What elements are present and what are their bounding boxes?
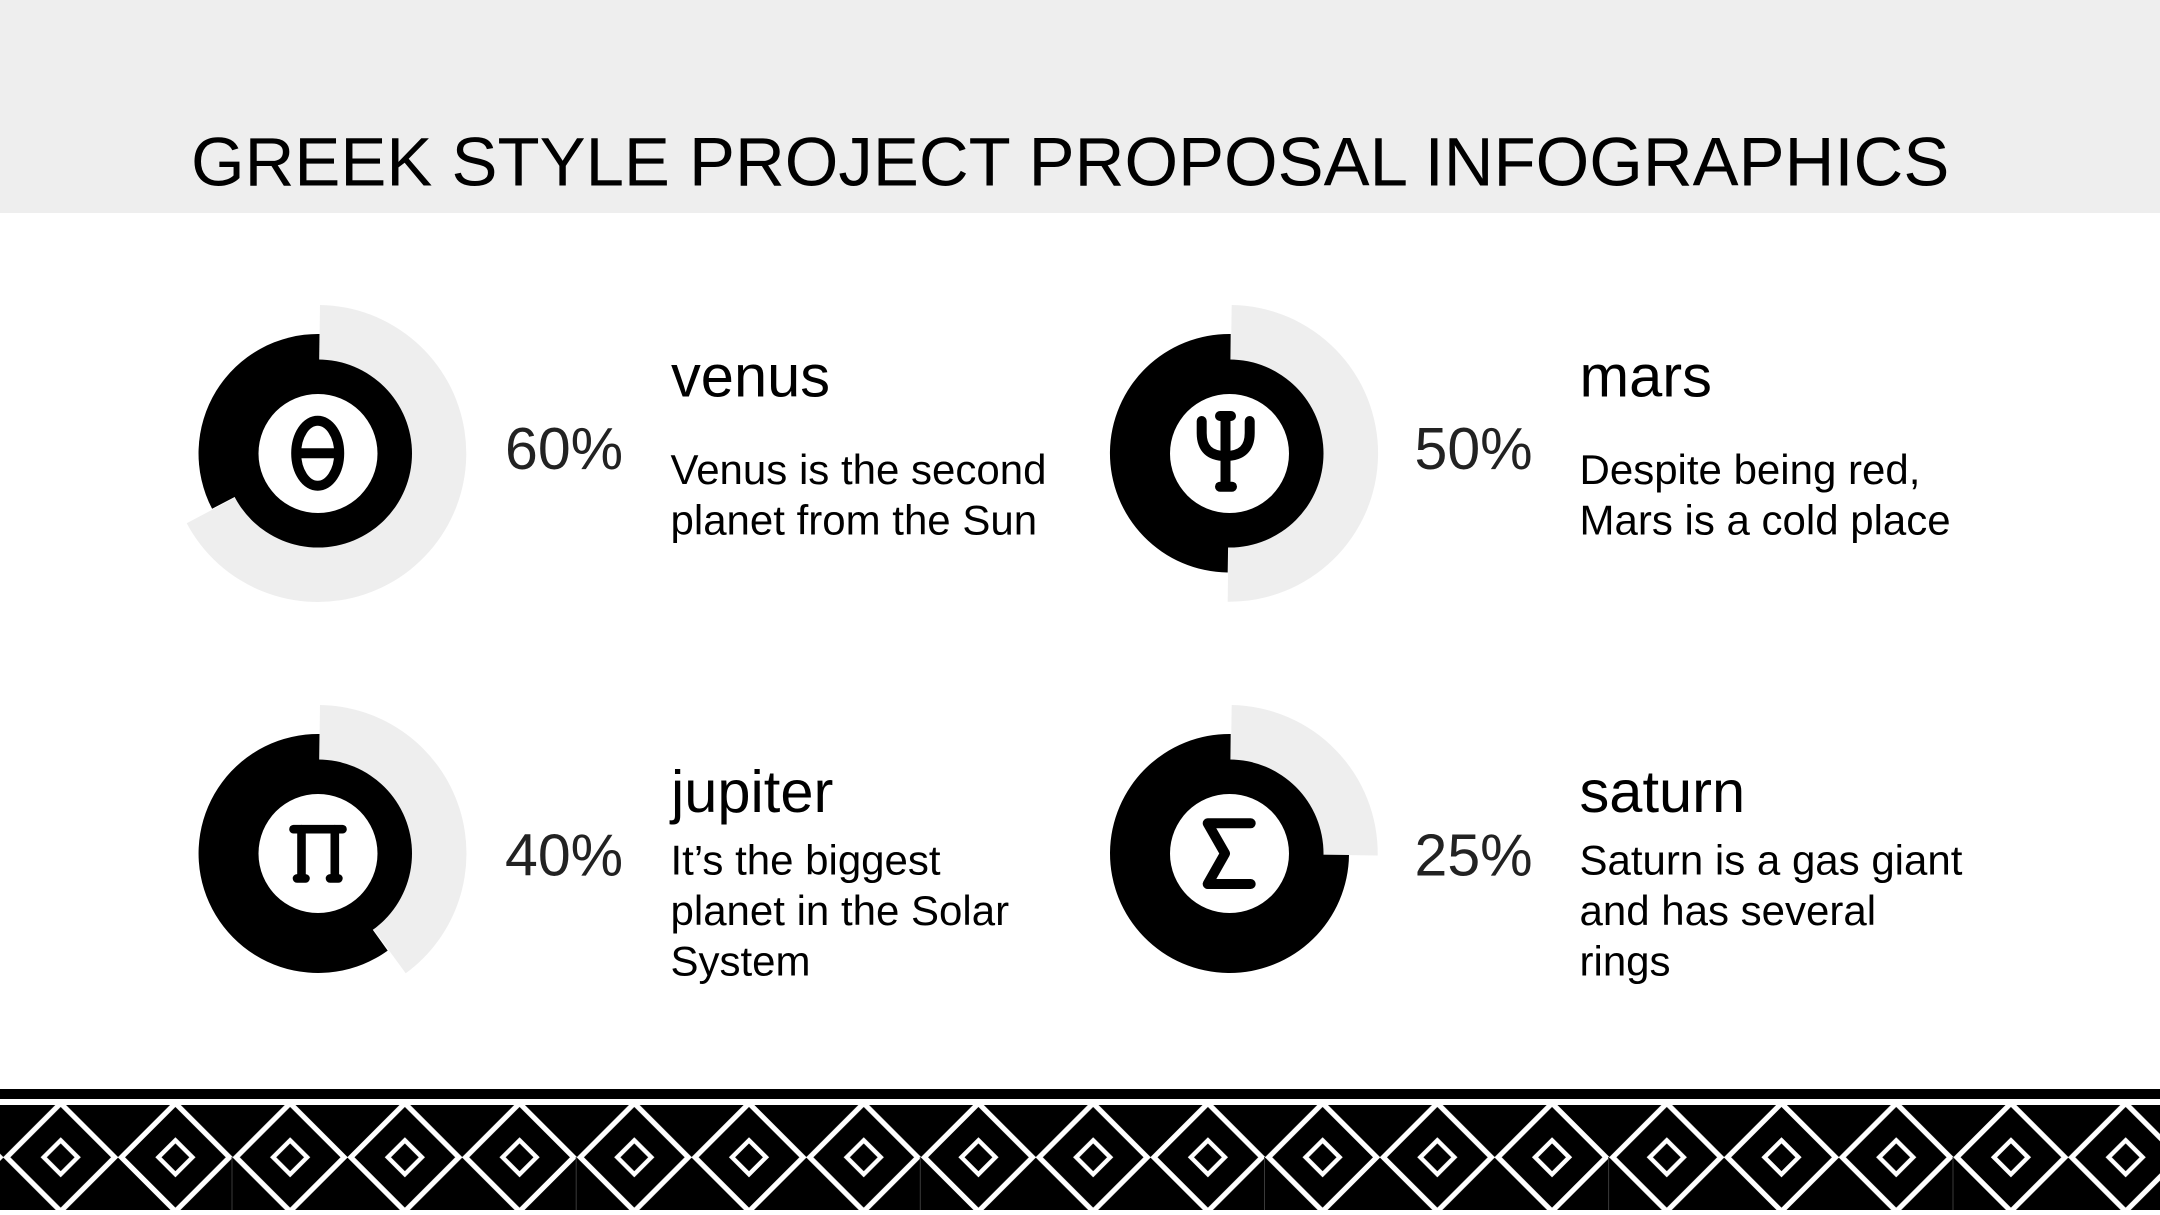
heading: saturn: saturn [1580, 758, 1745, 825]
header band [0, 0, 2160, 213]
heading: mars: mars [1580, 343, 1712, 410]
description: mars: Despite being red, [1580, 446, 1920, 493]
panel: venus [187, 305, 1046, 602]
donut chart: mars 50% [1110, 305, 1378, 602]
icon: sigma [1208, 823, 1251, 884]
donut chart: jupiter 40% [199, 705, 466, 973]
icon: psi [1202, 416, 1250, 487]
panel: mars [1110, 305, 1951, 602]
description: mars: Mars is a cold place [1580, 496, 1951, 544]
panel: saturn [1110, 705, 1963, 984]
description: jupiter: System [670, 937, 811, 984]
greek key border band [0, 1089, 2160, 1210]
description: saturn: rings [1580, 937, 1671, 984]
icon: theta [296, 421, 339, 486]
heading: jupiter: jupiter [669, 758, 833, 825]
description: venus: planet from the Sun [670, 496, 1037, 544]
percentage: 60%: 60% [505, 416, 623, 482]
title: GREEK STYLE PROJECT PROPOSAL INFOGRAPHICS [191, 124, 1949, 200]
panel: jupiter [199, 705, 1009, 984]
icon: pi [294, 829, 342, 878]
description: jupiter: It’s the biggest [670, 836, 941, 884]
donut chart: saturn 25% [1110, 705, 1378, 973]
heading: venus: venus [671, 343, 830, 410]
description: venus: Venus is the second [670, 446, 1046, 493]
percentage: 25%: 25% [1414, 823, 1533, 889]
percentage: 50%: 50% [1414, 416, 1533, 482]
percentage: 40%: 40% [505, 823, 623, 889]
description: saturn: and has several [1580, 887, 1876, 934]
description: jupiter: planet in the Solar [670, 887, 1009, 934]
donut chart: venus 60% [187, 305, 466, 602]
description: saturn: Saturn is a gas giant [1580, 836, 1963, 884]
